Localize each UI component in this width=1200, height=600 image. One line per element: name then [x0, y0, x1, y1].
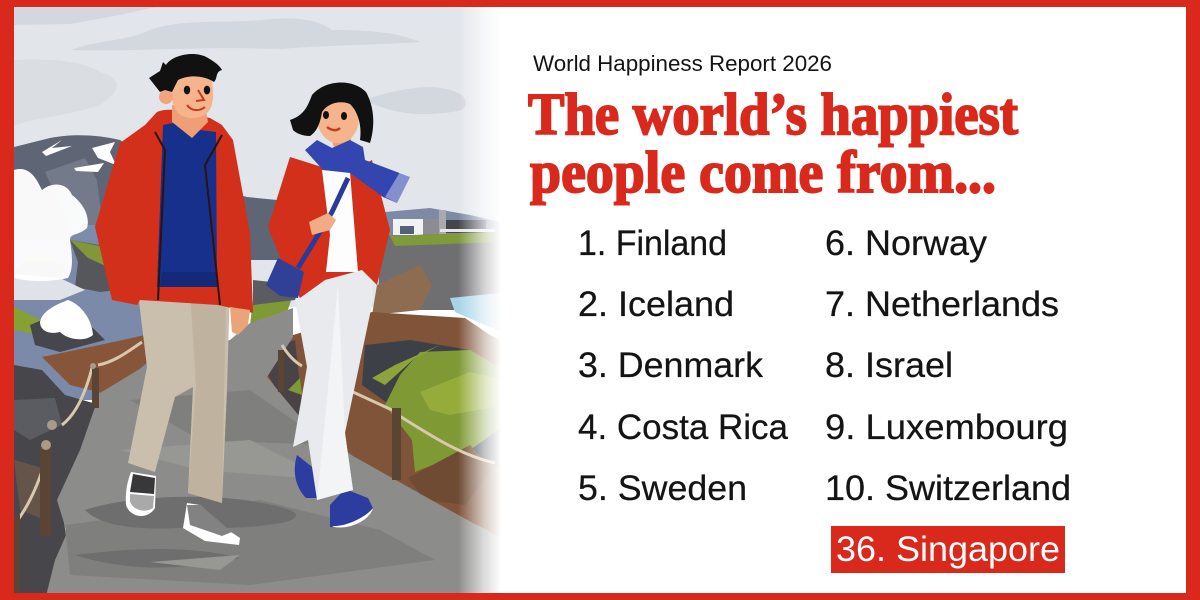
- heading: people come from...: [530, 139, 996, 205]
- woman: [266, 83, 410, 528]
- man trousers: [128, 285, 230, 503]
- ranking column 6 to 10: 9. Luxembourg: [825, 407, 1068, 447]
- ranking column 1 to 5: [578, 223, 788, 508]
- woman scarf: [305, 140, 410, 203]
- ranking column 1 to 5: 4. Costa Rica: [578, 407, 788, 447]
- man zip lines: [155, 132, 222, 305]
- left midground: water, moss and rocks: [14, 240, 154, 593]
- man shoes: [126, 472, 240, 545]
- steam plumes: [14, 169, 93, 340]
- right midground: shoreline, lagoon and moss: [250, 232, 510, 545]
- building: [393, 210, 495, 235]
- ranking column 6 to 10: 7. Netherlands: [825, 284, 1059, 324]
- walkway: [45, 308, 510, 600]
- fade to white: [458, 7, 506, 593]
- ranking column 6 to 10: [825, 223, 1071, 508]
- clouds: [14, 7, 466, 114]
- man: [95, 54, 253, 545]
- woman shirt: [322, 170, 358, 272]
- heading: The world’s happiest: [528, 81, 1018, 147]
- sky: [14, 7, 506, 307]
- subtitle: World Happiness Report 2026: [533, 51, 832, 76]
- ranking column 1 to 5: 5. Sweden: [578, 468, 747, 508]
- ranking column 6 to 10: 8. Israel: [825, 345, 953, 385]
- rope fence: [14, 342, 495, 593]
- woman jacket: [268, 157, 390, 298]
- heading: [528, 81, 1018, 205]
- ranking column 6 to 10: 6. Norway: [825, 223, 987, 263]
- ranking column 1 to 5: 2. Iceland: [578, 284, 734, 324]
- illustration: couple walking in Iceland: [14, 7, 510, 600]
- man hand: [230, 307, 250, 335]
- woman trousers: [293, 300, 372, 500]
- Singapore highlight: 36. Singapore: [836, 529, 1060, 569]
- ranking column 1 to 5: 1. Finland: [578, 223, 727, 263]
- woman hand: [309, 213, 336, 235]
- man sweater: [157, 122, 217, 287]
- woman bag: [266, 258, 304, 298]
- woman neck and head: [332, 138, 352, 147]
- man neck and head: [172, 105, 208, 138]
- man jacket: [95, 110, 253, 313]
- mountains: [14, 135, 500, 260]
- ranking column 1 to 5: 3. Denmark: [578, 345, 763, 385]
- woman bag strap: [298, 178, 348, 268]
- ranking column 6 to 10: 10. Switzerland: [825, 468, 1071, 508]
- woman shoes: [295, 455, 373, 528]
